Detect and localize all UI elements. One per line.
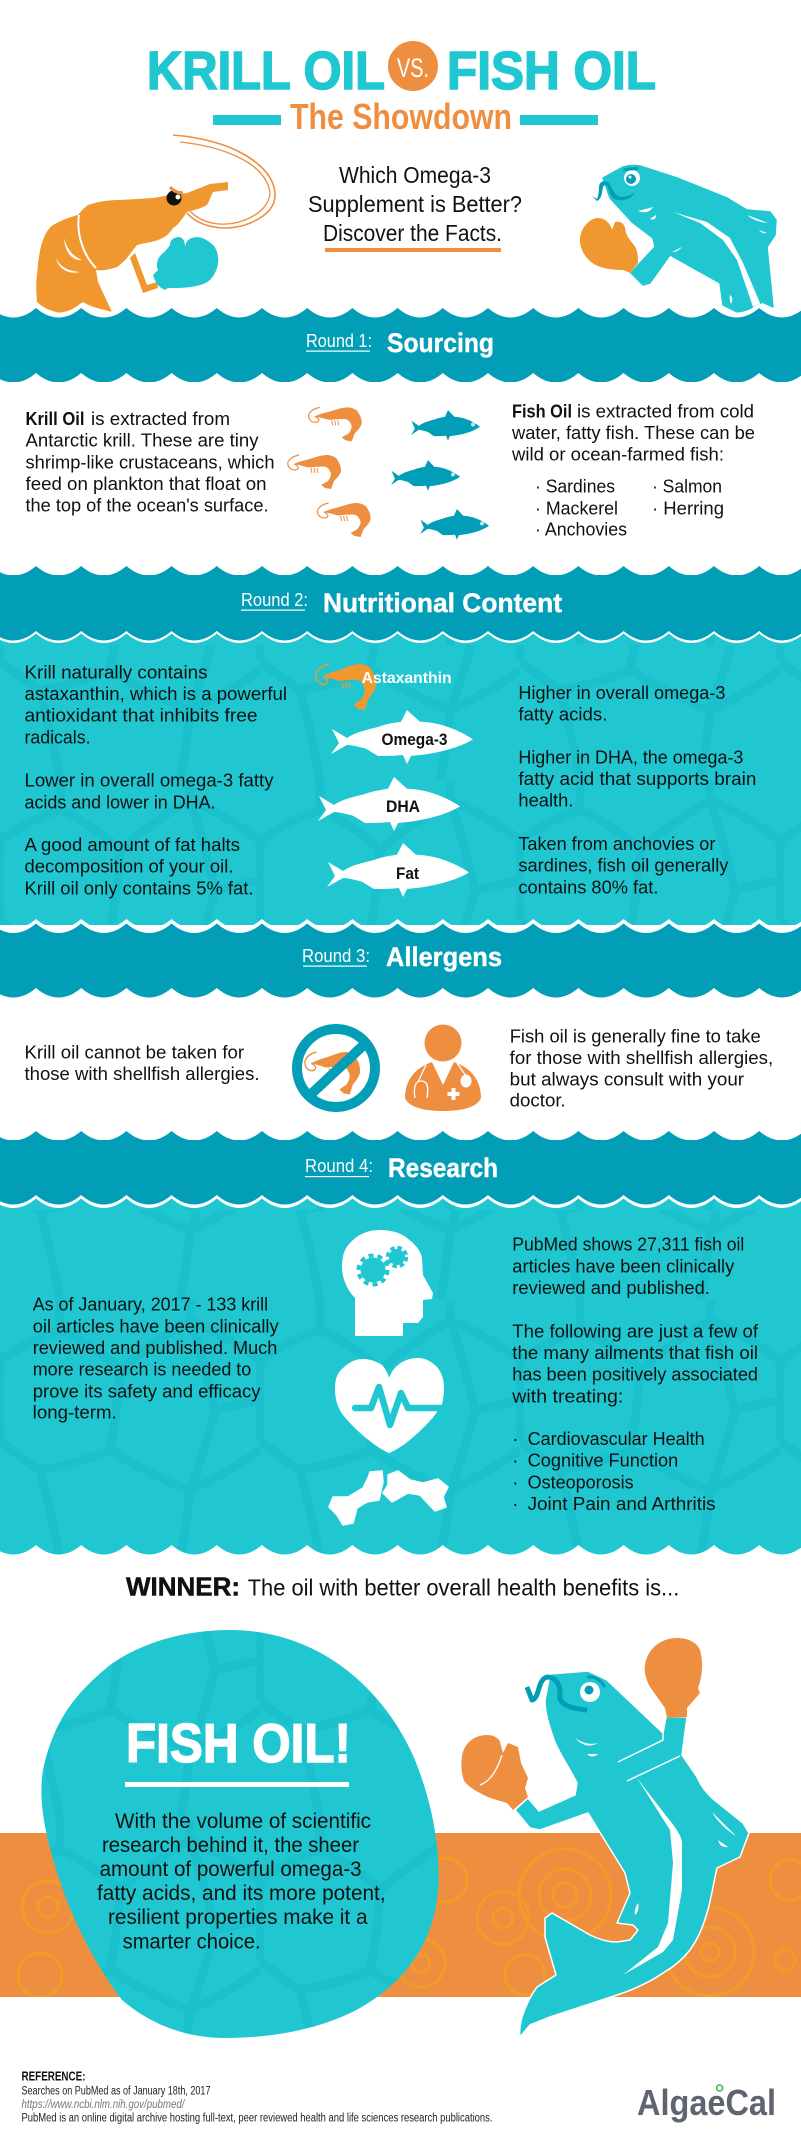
heading: winner bbox=[126, 1572, 679, 1602]
references: REFERENCE: bbox=[22, 2069, 86, 2084]
heading: winner: The oil with better overall health benefits is... bbox=[248, 1575, 679, 1601]
text: verdict: resilient properties make it a bbox=[108, 1906, 368, 1929]
text: krill nutrition: acids and lower in DHA. bbox=[24, 791, 216, 812]
icon: fat fish bbox=[327, 843, 469, 897]
text: fish research: PubMed shows 27,311 fish oil bbox=[512, 1234, 744, 1255]
subtitle: The Showdown bbox=[213, 96, 598, 137]
text: krill nutrition: decomposition of your oil. bbox=[24, 856, 234, 877]
question text: Supplement is Better? bbox=[308, 191, 522, 217]
text: fish oil source bbox=[511, 400, 755, 540]
text: fish research: reviewed and published. bbox=[512, 1277, 710, 1298]
references: https://www.ncbi.nlm.nih.gov/pubmed/ bbox=[22, 2099, 186, 2111]
text: fish oil source: · Sardines bbox=[535, 476, 615, 497]
text: fish nutrition: Taken from anchovies or bbox=[518, 833, 715, 854]
text: krill nutrition: Lower in overall omega-3 fatty bbox=[24, 770, 274, 791]
banner: round 3 allergens: Allergens bbox=[386, 942, 502, 972]
text: krill oil source: the top of the ocean's surface. bbox=[26, 495, 268, 516]
text: fish nutrition: fatty acids. bbox=[518, 704, 607, 725]
icon: no shrimp bbox=[297, 1029, 375, 1107]
text: fish research: Osteoporosis bbox=[528, 1471, 634, 1492]
text: krill nutrition: astaxanthin, which is a powerful bbox=[24, 683, 287, 704]
text: krill nutrition bbox=[24, 661, 287, 898]
icon: heart with pulse bbox=[335, 1358, 450, 1453]
text: fish allergens bbox=[510, 1025, 773, 1111]
text: fish research: Cardiovascular Health bbox=[528, 1428, 705, 1449]
text: verdict bbox=[97, 1810, 386, 1953]
icon: head with gears bbox=[342, 1230, 433, 1336]
question text: Discover the Facts. bbox=[323, 220, 502, 246]
banner: round 1 sourcing: Round 1: bbox=[306, 331, 372, 351]
banner: round 3 allergens bbox=[0, 919, 801, 1018]
text: fish research: has been positively associated bbox=[512, 1364, 758, 1385]
banner: round 4 research bbox=[0, 1131, 801, 1225]
banner: round 2 nutritional content bbox=[0, 566, 801, 661]
icon: omega-3 fish: Omega-3 bbox=[382, 731, 448, 749]
icons: fish group bbox=[391, 410, 489, 540]
banner: round 1 sourcing bbox=[0, 308, 801, 403]
text: fish research: the many ailments that fish oil bbox=[512, 1342, 758, 1363]
vs badge: VS. bbox=[397, 53, 429, 83]
panel: nutritional content bbox=[0, 634, 801, 925]
text: fish nutrition: contains 80% fat. bbox=[518, 876, 658, 897]
text: fish research: Joint Pain and Arthritis bbox=[528, 1493, 716, 1514]
text: fish research: · bbox=[512, 1450, 518, 1471]
character: boxing shrimp bbox=[36, 135, 275, 313]
text: fish allergens: but always consult with your bbox=[510, 1069, 744, 1090]
icon: DHA fish bbox=[318, 777, 460, 831]
text: krill nutrition: Krill naturally contains bbox=[24, 661, 208, 682]
icon: bones bbox=[329, 1471, 448, 1525]
text: fish oil source: · Anchovies bbox=[535, 519, 627, 540]
text: fish oil source: · Mackerel bbox=[535, 497, 618, 518]
panel: research bbox=[0, 1198, 801, 1555]
text: fish nutrition: fatty acid that supports brain bbox=[518, 768, 756, 789]
text: fish allergens: Fish oil is generally fine to take bbox=[510, 1025, 761, 1046]
references bbox=[22, 2069, 492, 2125]
text: verdict: With the volume of scientific bbox=[115, 1810, 371, 1833]
title: FISH OIL bbox=[447, 41, 656, 101]
text: krill research: reviewed and published. Much bbox=[33, 1337, 277, 1358]
text: fish research: · bbox=[512, 1471, 518, 1492]
text: fish allergens: doctor. bbox=[510, 1090, 566, 1111]
icon: DHA fish: DHA bbox=[386, 798, 420, 816]
text: fish nutrition bbox=[518, 682, 756, 897]
text: verdict: smarter choice. bbox=[123, 1930, 261, 1953]
text: fish nutrition: Higher in DHA, the omega-3 bbox=[518, 746, 743, 767]
banner: round 2 nutritional content: Round 2: bbox=[241, 590, 308, 610]
text: verdict: fatty acids, and its more potent, bbox=[97, 1882, 386, 1905]
banner: round 1 sourcing: Sourcing bbox=[387, 328, 494, 358]
text: verdict: research behind it, the sheer bbox=[102, 1834, 359, 1857]
text: krill nutrition: Krill oil only contains 5% fat. bbox=[24, 877, 254, 898]
text: fish allergens: for those with shellfish allergies, bbox=[510, 1047, 773, 1068]
vs badge bbox=[388, 41, 438, 91]
heading: fish oil: FISH OIL! bbox=[126, 1712, 351, 1774]
text: krill nutrition: A good amount of fat halts bbox=[24, 834, 240, 855]
text: krill oil source: shrimp-like crustaceans, which bbox=[26, 451, 274, 472]
text: krill research: prove its safety and efficacy bbox=[33, 1380, 261, 1401]
text: krill research: more research is needed to bbox=[33, 1359, 251, 1380]
character: winning fish bbox=[461, 1638, 749, 2037]
text: fish oil source: · Herring bbox=[652, 497, 724, 518]
text: fish research: articles have been clinically bbox=[512, 1255, 735, 1276]
text: fish research: · bbox=[512, 1493, 518, 1514]
text: fish nutrition: Higher in overall omega-3 bbox=[518, 682, 725, 703]
text: fish oil source: · Salmon bbox=[652, 476, 722, 497]
text: krill oil source: Krill Oil bbox=[26, 408, 84, 429]
text: fish oil source: wild or ocean-farmed fish: bbox=[511, 444, 724, 465]
panel: fish oil verdict blob bbox=[41, 1630, 439, 2038]
icon: astaxanthin shrimp: Astaxanthin bbox=[362, 670, 452, 687]
title bbox=[147, 41, 656, 101]
text: krill oil source: is extracted from bbox=[91, 408, 230, 429]
text: krill research: As of January, 2017 - 133 krill bbox=[33, 1294, 268, 1315]
text: krill nutrition: radicals. bbox=[24, 726, 90, 747]
icon: astaxanthin shrimp bbox=[316, 664, 452, 710]
character: boxing fish bbox=[580, 165, 776, 312]
heading: winner: WINNER: bbox=[126, 1572, 240, 1602]
icon: fat fish: Fat bbox=[396, 865, 419, 883]
text: krill research: oil articles have been clinically bbox=[33, 1315, 279, 1336]
text: fish research: with treating: bbox=[511, 1385, 623, 1406]
title: KRILL OIL bbox=[147, 41, 385, 101]
text: krill oil source: Antarctic krill. These are tiny bbox=[26, 430, 259, 451]
question text: Which Omega-3 bbox=[339, 162, 491, 188]
text: fish oil source: Fish Oil bbox=[512, 400, 572, 421]
banner: round 3 allergens: Round 3: bbox=[302, 946, 370, 966]
text: fish oil source: water, fatty fish. These can be bbox=[511, 422, 755, 443]
text: krill oil source bbox=[26, 408, 274, 516]
icons: shrimp group bbox=[288, 407, 371, 537]
text: fish research: · bbox=[512, 1428, 518, 1449]
text: fish nutrition: health. bbox=[518, 790, 573, 811]
text: krill nutrition: antioxidant that inhibits free bbox=[24, 705, 258, 726]
icon: doctor bbox=[405, 1024, 481, 1111]
text: krill allergens: Krill oil cannot be taken for bbox=[24, 1041, 244, 1062]
orange band bbox=[0, 1833, 801, 1997]
text: fish research bbox=[511, 1234, 759, 1514]
question text bbox=[308, 162, 522, 252]
text: krill oil source: feed on plankton that float on bbox=[26, 473, 266, 494]
text: fish research: The following are just a few of bbox=[512, 1320, 759, 1341]
text: fish nutrition: sardines, fish oil generally bbox=[518, 855, 729, 876]
text: verdict: amount of powerful omega-3 bbox=[100, 1858, 362, 1881]
text: krill research bbox=[33, 1294, 279, 1423]
text: fish oil source: is extracted from cold bbox=[577, 400, 754, 421]
text: krill allergens: those with shellfish allergies. bbox=[24, 1063, 260, 1084]
banner: round 2 nutritional content: Nutritional Content bbox=[323, 588, 562, 618]
references: Searches on PubMed as of January 18th, 2017 bbox=[22, 2085, 210, 2097]
banner: round 4 research: Round 4: bbox=[305, 1156, 373, 1176]
text: fish research: Cognitive Function bbox=[528, 1450, 678, 1471]
logo: AlgaeCal: AlgaeCal bbox=[637, 2082, 776, 2123]
subtitle: The Showdown: The Showdown bbox=[290, 96, 512, 137]
banner: round 4 research: Research bbox=[388, 1153, 498, 1183]
icon: omega-3 fish bbox=[331, 710, 473, 764]
text: krill research: long-term. bbox=[33, 1402, 117, 1423]
wave edge above round 1 bbox=[0, 303, 801, 333]
text: krill allergens bbox=[24, 1041, 260, 1084]
references: PubMed is an online digital archive hosting full-text, peer reviewed health and life sciences research publications. bbox=[22, 2113, 492, 2125]
